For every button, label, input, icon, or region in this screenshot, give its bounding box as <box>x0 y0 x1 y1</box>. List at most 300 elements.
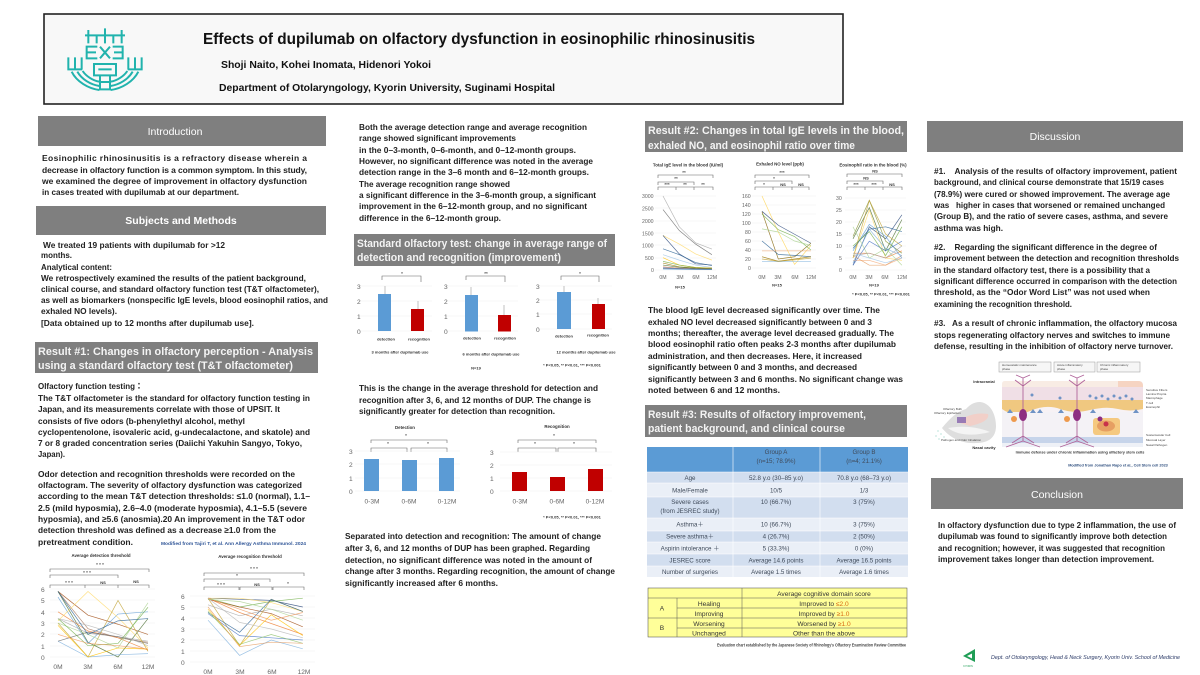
bar chart: detection <box>349 425 460 506</box>
icon: university logo <box>68 28 142 90</box>
table: patient background: 4 (26.7%) <box>763 534 789 540</box>
phase labels: Chronic inflammatory <box>1100 363 1129 367</box>
right-hand layer labels: Eosinophil <box>1146 405 1160 409</box>
text: separated detection and recognition: after 3, 6, and 12 months of DUP has been graphed. Regarding <box>345 543 590 553</box>
heading bar: result 2: Result #2: Changes in total IgE levels in the blood, <box>648 125 904 137</box>
text: discussion point 3 <box>934 318 1177 351</box>
text: biomarker results: significantly between 3 and 6 months. No significant change was <box>648 374 903 384</box>
bar chart: 3 months: 1 <box>357 314 361 321</box>
phase labels <box>999 362 1140 372</box>
bar chart: detection: 2 <box>349 462 353 469</box>
line chart: average recognition threshold: 4 <box>181 616 185 623</box>
line chart: total IgE: 2500 <box>642 206 654 212</box>
panel: standard olfactory test <box>345 234 616 588</box>
text: biomarker results: exhaled NO level decreased significantly between 0 and 3 <box>648 317 872 327</box>
line chart: total IgE <box>642 162 724 290</box>
table: patient background: 1/3 <box>860 488 869 494</box>
bar chart: 6 months: 2 <box>444 299 448 306</box>
table: patient background <box>647 447 908 577</box>
line chart: total IgE: N=15 <box>675 284 686 290</box>
text: biomarker results: administration, and then decreases. Here, it increased <box>648 351 862 361</box>
table: evaluation chart <box>648 588 907 638</box>
line chart: average detection threshold: * * * <box>65 580 73 585</box>
bar chart: 6 months: 0 <box>444 329 448 336</box>
table: evaluation chart: Improving <box>695 611 724 618</box>
bar chart: 6 months: N=19 <box>471 366 482 370</box>
line chart: exhaled NO: 140 <box>742 203 751 209</box>
text: biomarker results: noted between 6 and 12 months. <box>648 385 780 395</box>
bar chart: 6 months: recognition <box>494 336 516 340</box>
line chart: total IgE: 500 <box>645 256 654 262</box>
right-hand layer labels: Mucosal Layer <box>1146 438 1166 442</box>
line chart: eosinophil ratio: NS <box>872 168 878 174</box>
text: discussion point 1: (78.9%) were cured or showed improvement. The average age <box>934 189 1170 199</box>
line chart: eosinophil ratio: *** <box>871 182 877 187</box>
panel: introduction <box>38 116 326 197</box>
line chart: total IgE: ** <box>683 182 687 187</box>
right-hand layer labels: T cell <box>1146 401 1153 405</box>
line chart: average detection threshold: 3 <box>41 621 45 628</box>
table: patient background: JESREC score <box>669 558 711 564</box>
heading bar: result 2: exhaled NO, and eosinophil ratio over time <box>648 140 855 152</box>
line chart: average detection threshold: 0M <box>53 664 63 671</box>
heading bar: conclusion <box>931 478 1183 509</box>
line chart: total IgE: 3M <box>676 275 684 281</box>
text: threshold change: This is the change in the average threshold for detection and <box>359 383 598 393</box>
line chart: average recognition threshold: * * * <box>250 566 258 571</box>
text: biomarker results: months; thereafter, the average level decreased gradually. The <box>648 328 894 338</box>
olfactory neurons <box>1006 375 1094 447</box>
text: subjects and methods body: exhaled NO levels). <box>41 306 117 316</box>
bar chart: 12 months <box>536 271 616 368</box>
panel: result 2 <box>642 121 911 395</box>
text: discussion point 2: improvement between the detection and recognition thresholds <box>934 253 1179 263</box>
heading bar: discussion <box>927 121 1183 152</box>
text: average range summary: However, no significant difference was noted in the average <box>359 156 593 166</box>
bar chart: 3 months: 3 <box>357 284 361 291</box>
line chart: exhaled NO: NS <box>780 182 786 187</box>
phase labels: phase <box>1100 367 1109 371</box>
table: patient background: Group B <box>852 449 876 456</box>
text: olfactory function testing: Japan, and its measurements correlate with those of UPSIT. It <box>38 404 280 414</box>
text: thresholds definition: hyposmia), and ≥5.6 (anosmia).20 An improvement in the T&T odor <box>38 514 306 524</box>
heading bar: result 1 <box>35 342 318 373</box>
right-hand layer labels: Sensitive Fibers <box>1146 388 1168 392</box>
line chart: average recognition threshold: NS <box>254 582 260 587</box>
line chart: total IgE: *** <box>664 182 670 187</box>
text: introduction body: decrease in olfactory function is a common symptom. In this study, <box>42 165 307 175</box>
line chart: eosinophil ratio: 10 <box>836 244 842 250</box>
panel: subjects and methods <box>36 206 328 328</box>
line chart: total IgE: Total IgE level in the blood (IU/ml) <box>653 162 724 168</box>
line chart: eosinophil ratio: 0M <box>849 275 857 281</box>
text: thresholds definition <box>38 469 310 547</box>
text: separated detection and recognition: Separated into detection and recognition: The amount of change <box>345 531 601 541</box>
line chart: average detection threshold <box>41 553 155 671</box>
text: biomarker results: The blood IgE level decreased significantly over time. The <box>648 305 880 315</box>
text: discussion point 2: threshold, as the “Odor Word List” was not used when <box>934 287 1150 297</box>
line chart: average recognition threshold: 0 <box>181 660 185 667</box>
line chart: exhaled NO: 120 <box>742 212 751 218</box>
bar chart: recognition: * <box>573 441 575 446</box>
panel: result 1 <box>35 342 318 675</box>
line chart: total IgE: ** <box>674 176 678 181</box>
text: olfactory function testing: 7 or 8 graded concentration series (Daiichi Yakuhin Sangyo, Tokyo, <box>38 438 302 448</box>
bar chart: recognition: 2 <box>490 463 494 470</box>
table: evaluation chart: A <box>660 606 665 612</box>
bar chart: detection: 0-3M <box>364 498 380 506</box>
line chart: exhaled NO: *** <box>779 170 785 175</box>
citation: Modified from Tajiri T, et al. Ann Allergy Asthma Immunol. 2024 <box>161 541 306 546</box>
text: subjects and methods body: Analytical content: <box>41 262 112 272</box>
footer department text: Dept. of Otolaryngology, Head & Neck Surgery, Kyorin Univ. School of Medicine <box>991 655 1180 661</box>
table: patient background: 70.8 y.o (68–73 y.o) <box>837 475 891 482</box>
phase labels: Acute inflammatory <box>1057 363 1083 367</box>
line chart: average recognition threshold: Average recognition threshold <box>218 554 282 559</box>
line chart: exhaled NO: 12M <box>806 275 816 281</box>
text: separated detection and recognition <box>345 531 615 588</box>
line chart: average recognition threshold: 3 <box>181 627 185 634</box>
table: evaluation chart: Other than the above <box>793 630 855 638</box>
text: thresholds definition: Odor detection and recognition thresholds were recorded on the <box>38 469 295 479</box>
line chart: eosinophil ratio: 30 <box>836 196 842 202</box>
line chart: average detection threshold: NS <box>133 579 139 584</box>
bar chart: recognition: 1 <box>490 476 494 483</box>
bar chart: 3 months <box>357 271 432 354</box>
line chart: total IgE: 1000 <box>642 244 654 250</box>
line chart: exhaled NO: NS <box>798 182 804 187</box>
diagram: olfactory mucosa inflammation <box>934 362 1171 468</box>
line chart: average detection threshold: 4 <box>41 610 45 617</box>
text: discussion point 1: #1. Analysis of the results of olfactory improvement, patient <box>934 166 1177 176</box>
bar chart: detection: 1 <box>349 476 353 483</box>
bar chart: 12 months: 2 <box>536 298 540 305</box>
text: thresholds definition: olfactogram. The severity of olfactory dysfunction was categorized <box>38 480 302 490</box>
table: patient background: 10 (66.7%) <box>761 499 791 506</box>
line chart: average recognition threshold: 1 <box>181 649 185 656</box>
text: thresholds definition: 2.5 (mild hyposmia), 2.6–4.0 (moderate hyposmia), 4.1–5.5 (severe <box>38 503 307 513</box>
line chart: eosinophil ratio: 5 <box>839 256 842 262</box>
bar chart: 3 months: 0 <box>357 329 361 336</box>
text: subjects and methods body: [Data obtained up to 12 months after dupilumab use]. <box>41 318 254 328</box>
text: average range summary: Both the average detection range and average recognition <box>359 122 587 132</box>
phase labels: Homeostatic maintenance <box>1002 363 1037 367</box>
line chart: exhaled NO: 3M <box>774 275 782 281</box>
line chart: exhaled NO: 6M <box>791 275 799 281</box>
text: biomarker results <box>648 305 903 395</box>
line chart: eosinophil ratio: 0 <box>839 268 842 274</box>
text: thresholds definition: according to the mean T&T detection thresholds: ≤1.0 (normal), 1.1– <box>38 491 310 501</box>
line chart: total IgE: 12M <box>707 275 717 281</box>
table: patient background: Average 1.6 times <box>839 569 889 576</box>
table: evaluation chart: Worsened by ≥1.0 <box>797 621 851 628</box>
heading bar: conclusion: Conclusion <box>1031 489 1083 501</box>
text: biomarker results: blood eosinophil ratio often peaks 2-3 months after dupilumab <box>648 339 896 349</box>
table: patient background: Age <box>684 475 696 482</box>
mucosal layers <box>1002 381 1143 447</box>
bar chart: recognition: * <box>553 433 555 438</box>
text: threshold change: recognition after 3, 6, and 12 months of DUP. The change is <box>359 395 591 405</box>
bar chart: 3 months: * <box>401 271 403 276</box>
bar chart: detection: * <box>405 433 407 438</box>
bar chart: 12 months: detection <box>555 334 573 338</box>
text: conclusion body: In olfactory dysfunction due to type 2 inflammation, the use of <box>938 520 1176 530</box>
bar chart: recognition <box>490 424 612 520</box>
table: patient background: (n=4; 21.1%) <box>846 458 882 465</box>
line chart: total IgE: 0 <box>651 268 654 274</box>
text: discussion point 1 <box>933 166 1177 233</box>
icon: head profile: Olfactory Epithelium <box>934 411 961 415</box>
table: evaluation chart: Healing <box>698 601 721 608</box>
line chart: average detection threshold: 6 <box>41 587 45 594</box>
panel: discussion <box>927 121 1183 468</box>
right-hand layer labels <box>1146 388 1171 447</box>
bar chart: 6 months: 3 <box>444 284 448 291</box>
text: discussion point 3: defense, resulting in the inhibition of olfactory nerve turnover. <box>934 341 1173 351</box>
line chart: exhaled NO: 60 <box>745 239 751 245</box>
line chart: average recognition threshold: 2 <box>181 638 185 645</box>
heading bar: result 2 <box>645 121 907 152</box>
text: olfactory function testing: cyclopentenolone, isovaleric acid, g-undecalactone, and skatole) and <box>38 427 310 437</box>
bar chart: 12 months: recognition <box>587 332 609 338</box>
line chart: exhaled NO <box>742 162 816 288</box>
bar chart: 12 months: * P<0.05, ** P<0.01, *** P<0.001 <box>543 362 602 368</box>
line chart: eosinophil ratio: 12M <box>897 275 907 281</box>
line chart: average detection threshold: 12M <box>142 664 154 671</box>
diagram source: Modified from Jonathan Rapo et al., Cell Stem cell 2023 <box>1068 464 1168 468</box>
bar chart: detection: Detection <box>395 425 415 430</box>
table: patient background: 3 (75%) <box>853 522 875 528</box>
phase labels: phase <box>1002 367 1011 371</box>
bar chart: recognition: Recognition <box>544 424 570 429</box>
bar chart: 6 months: 6 months after dupilumab use <box>463 352 520 356</box>
bar chart: detection: 0 <box>349 489 353 496</box>
line chart: average detection threshold: 5 <box>41 598 45 605</box>
table: patient background: 10/5 <box>770 488 783 494</box>
affiliation: Department of Otolaryngology, Kyorin University, Suginami Hospital <box>219 83 555 94</box>
text: average range summary: improvement in the 6–12-month group, and no significant <box>359 201 587 211</box>
text: average range summary: range showed significant improvements <box>359 133 516 143</box>
line chart: average recognition threshold: * <box>236 573 238 578</box>
table: patient background: Number of surgeries <box>662 569 718 576</box>
panel: result 3 <box>645 405 908 648</box>
phase labels: phase <box>1057 367 1066 371</box>
line chart: eosinophil ratio: 20 <box>836 220 842 226</box>
heading bar: standard olfactory test <box>354 234 615 266</box>
diagram: olfactory mucosa inflammation: Nasal cavity <box>972 445 996 450</box>
bar chart: detection: 0-6M <box>401 498 417 506</box>
text: discussion point 2: examining the recognition threshold. <box>934 299 1072 309</box>
line chart: exhaled NO: 80 <box>745 230 751 236</box>
table: patient background: Average 16.5 points <box>837 558 891 564</box>
text: discussion point 3: #3. As a result of chronic inflammation, the olfactory mucosa <box>934 318 1177 328</box>
text: olfactory function testing: The T&T olfactometer is the standard for olfactory function testing in <box>38 393 310 403</box>
text: separated detection and recognition: change after 3 months. Regarding recognition, the amount of change <box>345 566 615 576</box>
line chart: eosinophil ratio: *** <box>853 182 859 187</box>
text: average range summary: in the 0–3-month, 0–6-month, and 0–12-month groups. <box>359 145 576 155</box>
line chart: exhaled NO: 0M <box>758 275 766 281</box>
bar chart: detection: * <box>387 441 389 446</box>
bar chart: recognition: 3 <box>490 450 494 457</box>
table: patient background: Severe cases <box>671 499 709 506</box>
line chart: eosinophil ratio: Eosinophil ratio in the blood (%) <box>839 162 907 168</box>
bar chart: 3 months: 2 <box>357 299 361 306</box>
text: discussion point 2: in the standard olfactory test, there is a possibility that a <box>934 265 1150 275</box>
text: discussion point 1: asthma was high. <box>934 223 1003 233</box>
bar chart: recognition: 0-12M <box>586 498 604 506</box>
heading bar: discussion: Discussion <box>1030 131 1081 143</box>
line chart: eosinophil ratio: 6M <box>881 275 889 281</box>
bar chart: 3 months: recognition <box>408 336 430 342</box>
heading bar: subjects and methods <box>36 206 326 235</box>
text: subjects and methods body: months. <box>41 250 72 260</box>
table: evaluation chart: B <box>660 625 665 632</box>
bar chart: 6 months: ** <box>484 271 488 276</box>
right-hand layer labels: Lamina Propria <box>1146 392 1167 396</box>
table: patient background: (n=15; 78.9%) <box>756 458 796 465</box>
line chart: total IgE: 2000 <box>642 219 654 225</box>
heading bar: result 3: Result #3: Results of olfactory improvement, <box>648 409 866 421</box>
line chart: eosinophil ratio: 3M <box>865 275 873 281</box>
table: patient background: Average 14.6 points <box>749 558 803 564</box>
line chart: eosinophil ratio: NS <box>889 182 895 187</box>
text: discussion point 2: significant difference occurred in comparison with the detection <box>934 276 1177 286</box>
text: introduction body: in cases treated with dupilumab at our department. <box>42 187 239 197</box>
line chart: eosinophil ratio: N=19 <box>869 282 880 288</box>
heading bar: introduction <box>38 116 326 146</box>
table: evaluation chart: Unchanged <box>692 630 726 638</box>
text: subjects and methods body: as well as biomarkers (nonspecific IgE levels, blood eosinophil ratios, and <box>41 295 328 305</box>
line chart: exhaled NO: Exhaled NO level (ppb) <box>756 162 804 166</box>
line chart: average detection threshold: 1 <box>41 644 45 651</box>
line chart: average detection threshold: 0 <box>41 655 45 662</box>
line chart: average detection threshold: Average detection threshold <box>71 553 131 558</box>
text: introduction body: Eosinophilic rhinosinusitis is a refractory disease wherein a <box>42 153 307 163</box>
line chart: total IgE: 1500 <box>642 232 654 238</box>
heading bar: introduction: Introduction <box>148 126 203 138</box>
line chart: average recognition threshold <box>181 554 315 675</box>
text: thresholds definition: detection threshold was defined as a decrease ≥1.0 from the <box>38 525 276 535</box>
right-hand layer labels: Nasal Pathogen <box>1146 443 1168 447</box>
heading bar: result 3 <box>645 405 907 437</box>
text: conclusion body: dupilumab was found to significantly improve both detection <box>938 531 1167 541</box>
line chart: average recognition threshold: * <box>287 581 289 586</box>
bar chart: 12 months: 12 months after dupilumab use <box>556 350 616 354</box>
icon: head profile <box>934 402 996 443</box>
table: evaluation chart: Average cognitive domain score <box>777 591 871 598</box>
line chart: average recognition threshold: 6 <box>181 594 185 601</box>
bar chart: detection: * <box>427 441 429 446</box>
bar chart: recognition: * <box>534 441 536 446</box>
text: thresholds definition: pretreatment condition. <box>38 537 133 547</box>
panel: conclusion <box>931 478 1183 564</box>
line chart: total IgE: 0M <box>659 275 667 281</box>
line chart: average detection threshold: 3M <box>83 664 93 671</box>
icon: head profile: Olfactory Bulb <box>943 407 962 411</box>
line chart: average recognition threshold: 5 <box>181 605 185 612</box>
bar chart: recognition: 0-6M <box>549 498 565 506</box>
line chart: total IgE: 3000 <box>642 194 654 200</box>
table: patient background: 5 (33.3%) <box>763 546 789 552</box>
bar chart: recognition: 0 <box>490 489 494 496</box>
heading bar: standard olfactory test: detection and recognition (improvement) <box>357 252 561 264</box>
text: average range summary <box>359 122 596 223</box>
line chart: average detection threshold: NS <box>100 580 106 585</box>
line chart: exhaled NO: 40 <box>745 248 751 254</box>
text: subjects and methods body: We retrospectively examined the results of the patient background, <box>41 273 306 283</box>
table: patient background: 3 (75%) <box>853 499 875 506</box>
bar chart: 6 months <box>444 271 520 370</box>
line chart: eosinophil ratio: 25 <box>836 208 842 214</box>
table: patient background: 52.8 y.o (30–85 y.o) <box>749 475 803 482</box>
line chart: average recognition threshold: * * * <box>217 582 225 587</box>
table: patient background: Aspirin intolerance ＋ <box>661 546 719 552</box>
text: discussion point 1: was higher in cases that worsened or remained unchanged <box>933 200 1165 210</box>
heading bar: result 1: using a standard olfactory test (T&T olfactometer) <box>38 360 293 372</box>
table: patient background: Severe asthma＋ <box>666 534 714 540</box>
bar chart: 12 months: 3 <box>536 284 540 291</box>
text: introduction body <box>41 153 307 197</box>
diagram: olfactory mucosa inflammation: Intracranial <box>973 379 995 384</box>
caption: evaluation chart source: Evaluation chart established by the Japanese Society of Rhinology's Olfactory Examination Review Committee <box>717 642 907 648</box>
text: conclusion body: and recognition; however, it was suggested that recognition <box>938 543 1165 553</box>
line chart: total IgE: ** <box>682 170 686 175</box>
bar chart: 3 months: 3 months after dupilumab use <box>372 350 429 354</box>
text: discussion point 1: background, and clinical course demonstrate that 15/19 cases <box>934 177 1164 187</box>
right-hand layer labels: Macrophage <box>1146 396 1163 400</box>
line chart: exhaled NO: 100 <box>742 221 751 227</box>
text: threshold change: significantly greater for detection than recognition. <box>359 406 555 416</box>
line chart: average detection threshold: * * * <box>96 562 104 567</box>
text: average range summary: difference in the 6–12-month group. <box>359 213 501 223</box>
text: average range summary: detection range in the 3–6 month and 6–12-month groups. <box>359 167 589 177</box>
table: patient background: 2 (50%) <box>853 534 875 540</box>
table: patient background: 0 (0%) <box>855 546 873 552</box>
table: patient background: Asthma＋ <box>676 522 704 528</box>
text: discussion point 3: stops regenerating olfactory nerves and switches to immune <box>934 330 1170 340</box>
text: olfactory function testing: Japan). <box>38 449 65 459</box>
text: discussion point 2 <box>934 242 1179 309</box>
immune cells <box>1007 394 1139 426</box>
line chart: eosinophil ratio: * P<0.05, ** P<0.01, *** P<0.001 <box>852 292 911 296</box>
heading bar: standard olfactory test: Standard olfactory test: change in average range of <box>357 238 607 250</box>
text: conclusion body: improvement takes longer than detection improvement. <box>938 554 1154 564</box>
bar chart: detection: 0-12M <box>438 498 456 506</box>
text: subjects and methods body: clinical course, and standard olfactory function test (T&T olfactometer), <box>41 284 319 294</box>
line chart: exhaled NO: * <box>763 182 765 187</box>
table: evaluation chart: Improved by ≥1.0 <box>799 611 850 618</box>
line chart: total IgE: ** <box>701 182 705 187</box>
heading bar: result 3: patient background, and clinical course <box>648 423 845 435</box>
line chart: eosinophil ratio: NS <box>863 176 869 180</box>
line chart: exhaled NO: 0 <box>748 266 751 272</box>
text: conclusion body <box>938 520 1176 564</box>
text: separated detection and recognition: significantly increased after 6 months. <box>345 578 498 588</box>
text: discussion point 1: (Group B), and the ratio of severe cases, asthma, and severe <box>934 211 1168 221</box>
footer <box>963 649 1180 668</box>
text: subjects and methods body <box>41 240 328 328</box>
text: separated detection and recognition: detection, no significant difference was noted in the amount of <box>345 555 592 565</box>
icon: head profile: Pathogen and Odor Inhalation <box>941 438 981 442</box>
line chart: average detection threshold: 2 <box>41 632 45 639</box>
bar chart: recognition: * P<0.05, ** P<0.01, *** P<0.001 <box>543 514 602 520</box>
line chart: average detection threshold: * * * <box>83 570 91 575</box>
line chart: exhaled NO: N=15 <box>772 282 783 288</box>
bar chart: detection: 3 <box>349 449 353 456</box>
table: patient background: Average 1.5 times <box>751 569 801 576</box>
text: biomarker results: significantly between 0 and 3 months, and decreased <box>648 362 857 372</box>
text: subjects and methods body: We treated 19 patients with dupilumab for >12 <box>43 240 225 250</box>
